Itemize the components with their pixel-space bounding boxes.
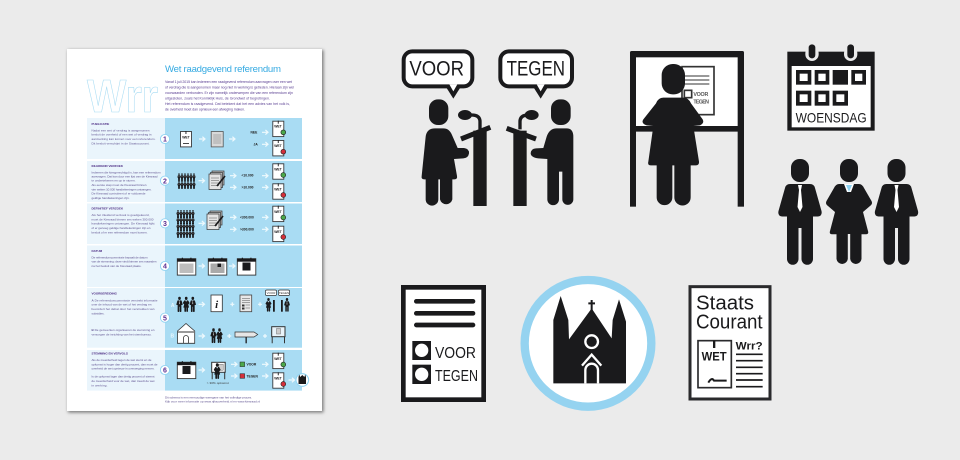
row 6: stemming en vervolg: TEGEN <box>246 374 258 378</box>
row 6: stemming en vervolg: > 30% opkomst <box>207 381 229 385</box>
row 6: stemming en vervolg: WET <box>274 376 283 380</box>
row 3: definitief verzoek: <300.000 <box>240 216 254 220</box>
row 1: publicatie: besluit de overheid of een wet of verdrag in <box>92 132 152 136</box>
intro paragraph: de overheid moet dan opnieuw een afweging maken. <box>165 108 245 112</box>
row 6: stemming en vervolg: Als de meerderheid tegen de wet stemt en de <box>92 358 152 362</box>
row 5: voorbereiding: TEGEN <box>279 291 289 295</box>
row 3: definitief verzoek: DEFINITIEF VERZOEK <box>92 206 124 210</box>
poster title: Wet raadgevend referendum <box>165 64 281 75</box>
row 5: voorbereiding: subsidies. <box>92 311 105 315</box>
row 2: inleidend verzoek: te ondertekenen en op te sturen. <box>92 179 136 183</box>
poster footer note: Kijk voor meer informatie op www.rijksoverheid.nl en www.kiesraad.nl <box>165 400 260 404</box>
row 1: publicatie: NEE <box>250 130 258 134</box>
row 1: publicatie: Nadat een wet of verdrag is aangenomen <box>92 128 150 132</box>
row 2: inleidend verzoek: Als eerste stap moet de Kiesraad binnen <box>92 183 147 187</box>
row 3: definitief verzoek: WET <box>274 230 283 234</box>
icon: debate speakers VOOR and TEGEN <box>404 51 573 206</box>
row 3: definitief verzoek: of er genoeg geldige handtekeningen zijn en <box>92 226 151 230</box>
row 6: stemming en vervolg: STEMMING EN VERVOLG <box>92 351 129 355</box>
speech bubble VOOR: VOOR <box>409 57 464 81</box>
row 2: inleidend verzoek: <10.000 <box>242 174 254 178</box>
intro paragraph <box>165 80 294 112</box>
icon: ballot paper: TEGEN <box>435 368 478 385</box>
row 5: voorbereiding: 5 <box>163 315 167 322</box>
woman at lectern <box>422 99 490 206</box>
row 6: stemming en vervolg: WET <box>274 357 283 361</box>
row 1: publicatie: PUBLICATIE <box>92 122 109 126</box>
row 5: voorbereiding: A De referendumcommissie verstrekt informatie <box>92 298 158 302</box>
row 2: inleidend verzoek: >10.000 <box>242 186 254 190</box>
row 2: inleidend verzoek <box>87 161 302 202</box>
icon: Staatscourant newspaper: Wrr? <box>736 340 763 352</box>
row 4: datum: 4 <box>163 264 167 271</box>
row 5: voorbereiding: B <box>170 334 174 340</box>
ballot in booth: TEGEN <box>693 100 709 106</box>
row 3: definitief verzoek: 3 <box>163 221 167 228</box>
row 5: voorbereiding: A <box>171 303 175 309</box>
icon: voter in polling booth <box>630 51 744 207</box>
row 2: inleidend verzoek: WET <box>274 168 283 172</box>
ballot in booth: VOOR <box>693 92 708 98</box>
row 3: definitief verzoek: WET <box>274 210 283 214</box>
poster footer note: Dit schema is een eenvoudige weergave van het volledige proces. <box>165 396 252 400</box>
row 1: publicatie: WET <box>182 136 191 140</box>
row 3: definitief verzoek: Als het inleidend verzoek is goedgekeurd, <box>92 213 150 217</box>
row 2: inleidend verzoek: aanvragen. Dat kan door een lijst van de Kiesraad <box>92 175 158 179</box>
row 2: inleidend verzoek: vier weken 10.000 handtekeningen ontvangen. <box>92 187 152 191</box>
intro paragraph: voorwaarden verbonden. Er zijn namelijk onderwerpen die van een referendum zijn <box>165 91 293 95</box>
icon: Staatscourant newspaper: Courant <box>696 310 763 333</box>
row 6: stemming en vervolg: opkomst is hoger dan dertig procent, dan moet de <box>92 362 158 366</box>
row 1: publicatie: aanmerking kan komen voor een referendum. <box>92 137 156 141</box>
voter figure <box>643 64 703 205</box>
poster: Wet raadgevend referendum <box>67 49 324 412</box>
man at lectern <box>507 99 573 206</box>
icon: Staatscourant newspaper <box>690 287 770 399</box>
row 3: definitief verzoek: handtekeningen ontvangen. De Kiesraad kijkt <box>92 222 155 226</box>
row 5: voorbereiding: B De gemeenten organiseren de stemming en <box>92 328 155 332</box>
outlined Wrr lettering: Wrr <box>87 70 158 122</box>
row 6: stemming en vervolg: overheid de wet opnieuw in overweging nemen. <box>92 367 155 371</box>
row 2: inleidend verzoek: De Kiesraad controleert of er voldoende <box>92 192 146 196</box>
row 6: stemming en vervolg: Is de opkomst lager dan dertig procent of steemt <box>92 375 155 379</box>
icon: ballot paper <box>403 287 484 400</box>
row 5: voorbereiding: bevordert het debat door het verstrekken van <box>92 307 155 311</box>
row 1: publicatie <box>87 118 302 159</box>
icon: calendar woensdag <box>787 44 875 131</box>
icon: Staatscourant newspaper: WET <box>702 350 727 364</box>
row 5: voorbereiding: VOOR <box>267 291 276 295</box>
intro paragraph: Vanaf 1 juli 2015 kan iedereen een raadgevend referendum aanvragen over een wet <box>165 80 292 84</box>
row 3: definitief verzoek: >300.000 <box>240 228 254 232</box>
row 2: inleidend verzoek: 2 <box>163 178 167 185</box>
row 5: voorbereiding: VOORBEREIDING <box>92 291 118 295</box>
intro paragraph: uitgesloten, zoals het Koninklijk Huis, de Grondwet of begrotingen. <box>165 96 270 100</box>
icon: calendar woensdag: WOENSDAG <box>796 110 867 126</box>
row 5: voorbereiding: i <box>215 299 219 311</box>
row 3: definitief verzoek <box>87 204 302 244</box>
row 4: datum: na het besluit van de Kiesraad plaats. <box>92 264 142 268</box>
row 2: inleidend verzoek: geldige handtekeningen zijn. <box>92 196 130 200</box>
icon: church in blue circle <box>525 280 651 407</box>
row 1: publicatie: 1 <box>163 137 167 144</box>
row 2: inleidend verzoek: WET <box>274 188 283 192</box>
row 2: inleidend verzoek: Iedereen die kiesgerechtigd is, kan een referendum <box>92 170 161 174</box>
icon: three officials <box>778 159 918 265</box>
speech bubble VOOR <box>404 51 472 99</box>
icon: ballot paper: VOOR <box>435 345 476 362</box>
row 1: publicatie: WET <box>274 144 283 148</box>
row 4: datum: DATUM <box>92 249 103 253</box>
row 6: stemming en vervolg <box>87 350 309 391</box>
row 4: datum: De referendumcommissie bepaalt de datum <box>92 255 148 259</box>
poster footer note <box>165 396 260 404</box>
row 1: publicatie: WET <box>274 124 283 128</box>
intro paragraph: of verdrag die is aangenomen maar nog niet in werking is getreden. Hieraan zijn wel <box>165 86 294 90</box>
row 3: definitief verzoek: besluit of er een referendum moet komen. <box>92 230 148 234</box>
speech bubble TEGEN: TEGEN <box>507 57 565 81</box>
row 6: stemming en vervolg: 6 <box>163 368 167 375</box>
row 5: voorbereiding: over de inhoud van de wet of het verdrag en <box>92 303 152 307</box>
intro paragraph: Het referendum is raadgevend. Dat betekent dat het een advies van het volk is, <box>165 102 290 106</box>
speech bubble TEGEN <box>500 51 572 99</box>
row 3: definitief verzoek: moet de Kiesraad binnen zes weken 300.000 <box>92 217 154 221</box>
row 2: inleidend verzoek: INLEIDEND VERZOEK <box>92 164 124 168</box>
row 4: datum <box>87 246 302 287</box>
row 1: publicatie: JA <box>254 142 258 146</box>
row 1: publicatie: Dit besluit verschijnt in de Staatscourant. <box>92 141 150 145</box>
row 6: stemming en vervolg: VOOR <box>246 363 257 367</box>
ballot in booth <box>682 67 714 115</box>
row 5: voorbereiding: verzorgen de inrichting van het stembureau. <box>92 332 152 336</box>
row 6: stemming en vervolg: in werking. <box>92 383 108 387</box>
row 6: stemming en vervolg: de meerderheid voor de wet, dan treedt de wet <box>92 379 155 383</box>
row 5: voorbereiding <box>87 288 302 348</box>
row 4: datum: van de stemming: deze vindt binnen zes maanden <box>92 260 157 264</box>
icon: Staatscourant newspaper: Staats <box>696 291 754 314</box>
